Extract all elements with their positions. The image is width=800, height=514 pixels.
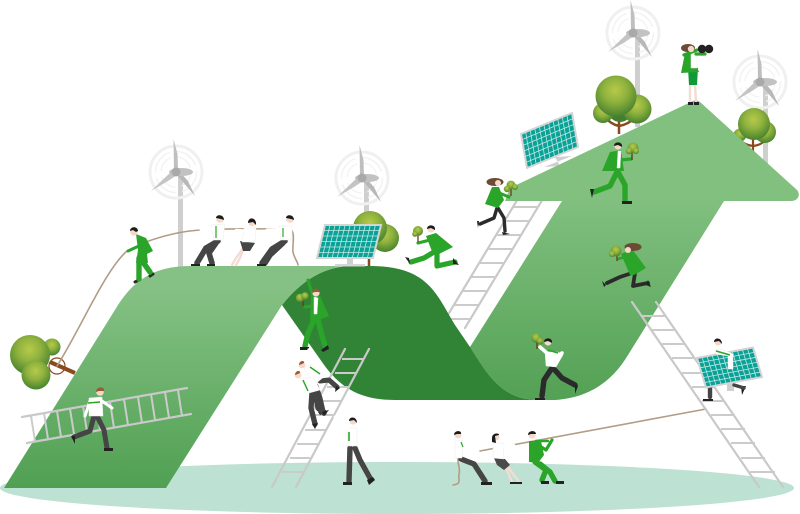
rope: top tug of war <box>57 229 298 366</box>
tree: top beside arrow <box>593 76 652 134</box>
arrow: left rising band <box>4 266 352 488</box>
tree: right of arrow <box>734 108 776 153</box>
wind turbine: centre <box>336 145 388 227</box>
person: man climbing, upper <box>299 350 340 415</box>
person: man running uphill with tree <box>590 142 639 204</box>
person: woman running onto ladder with tree <box>477 178 518 235</box>
person: woman with binoculars <box>681 44 713 105</box>
person: man running with tree <box>531 333 578 400</box>
wind turbine: right <box>734 49 786 164</box>
person: man pulling, top left <box>191 215 225 266</box>
ground ellipse <box>0 462 794 514</box>
person: woman pulling, top <box>232 218 256 265</box>
person: man walking <box>335 417 375 485</box>
person: woman pulling, bottom <box>492 433 522 484</box>
person: woman leaping with tree <box>602 243 651 287</box>
person: green man pulling, bottom <box>528 431 564 484</box>
arrow: upper right section <box>470 100 799 400</box>
tree: behind centre solar panel <box>353 211 399 267</box>
dark wave segment <box>282 266 540 400</box>
person: green man leaping with tree <box>405 225 459 266</box>
solar panel: upper arrow <box>521 113 578 168</box>
ladder: right <box>632 302 783 487</box>
person: man carrying ladder <box>71 387 113 451</box>
wind turbine: top centre-left <box>150 139 202 267</box>
person: green man holding tree with raised arm <box>296 280 329 352</box>
person: man pulling, top right <box>257 215 294 266</box>
person: man pulling, bottom left <box>454 431 492 485</box>
person: man carrying solar panel <box>697 338 762 401</box>
ladder: under the hill <box>272 349 369 487</box>
person: green man pulling rope <box>128 227 153 282</box>
tree with rope: left <box>10 335 75 390</box>
solar panel: centre hilltop <box>317 225 381 266</box>
person: man climbing, lower <box>295 371 329 429</box>
rope: bottom tug of war <box>453 409 706 485</box>
dark wave overlap on arrow <box>460 345 534 400</box>
ladder: behind upper arrow <box>440 197 544 328</box>
wind turbine: top <box>607 0 659 127</box>
ladder: carried horizontally <box>22 388 191 443</box>
